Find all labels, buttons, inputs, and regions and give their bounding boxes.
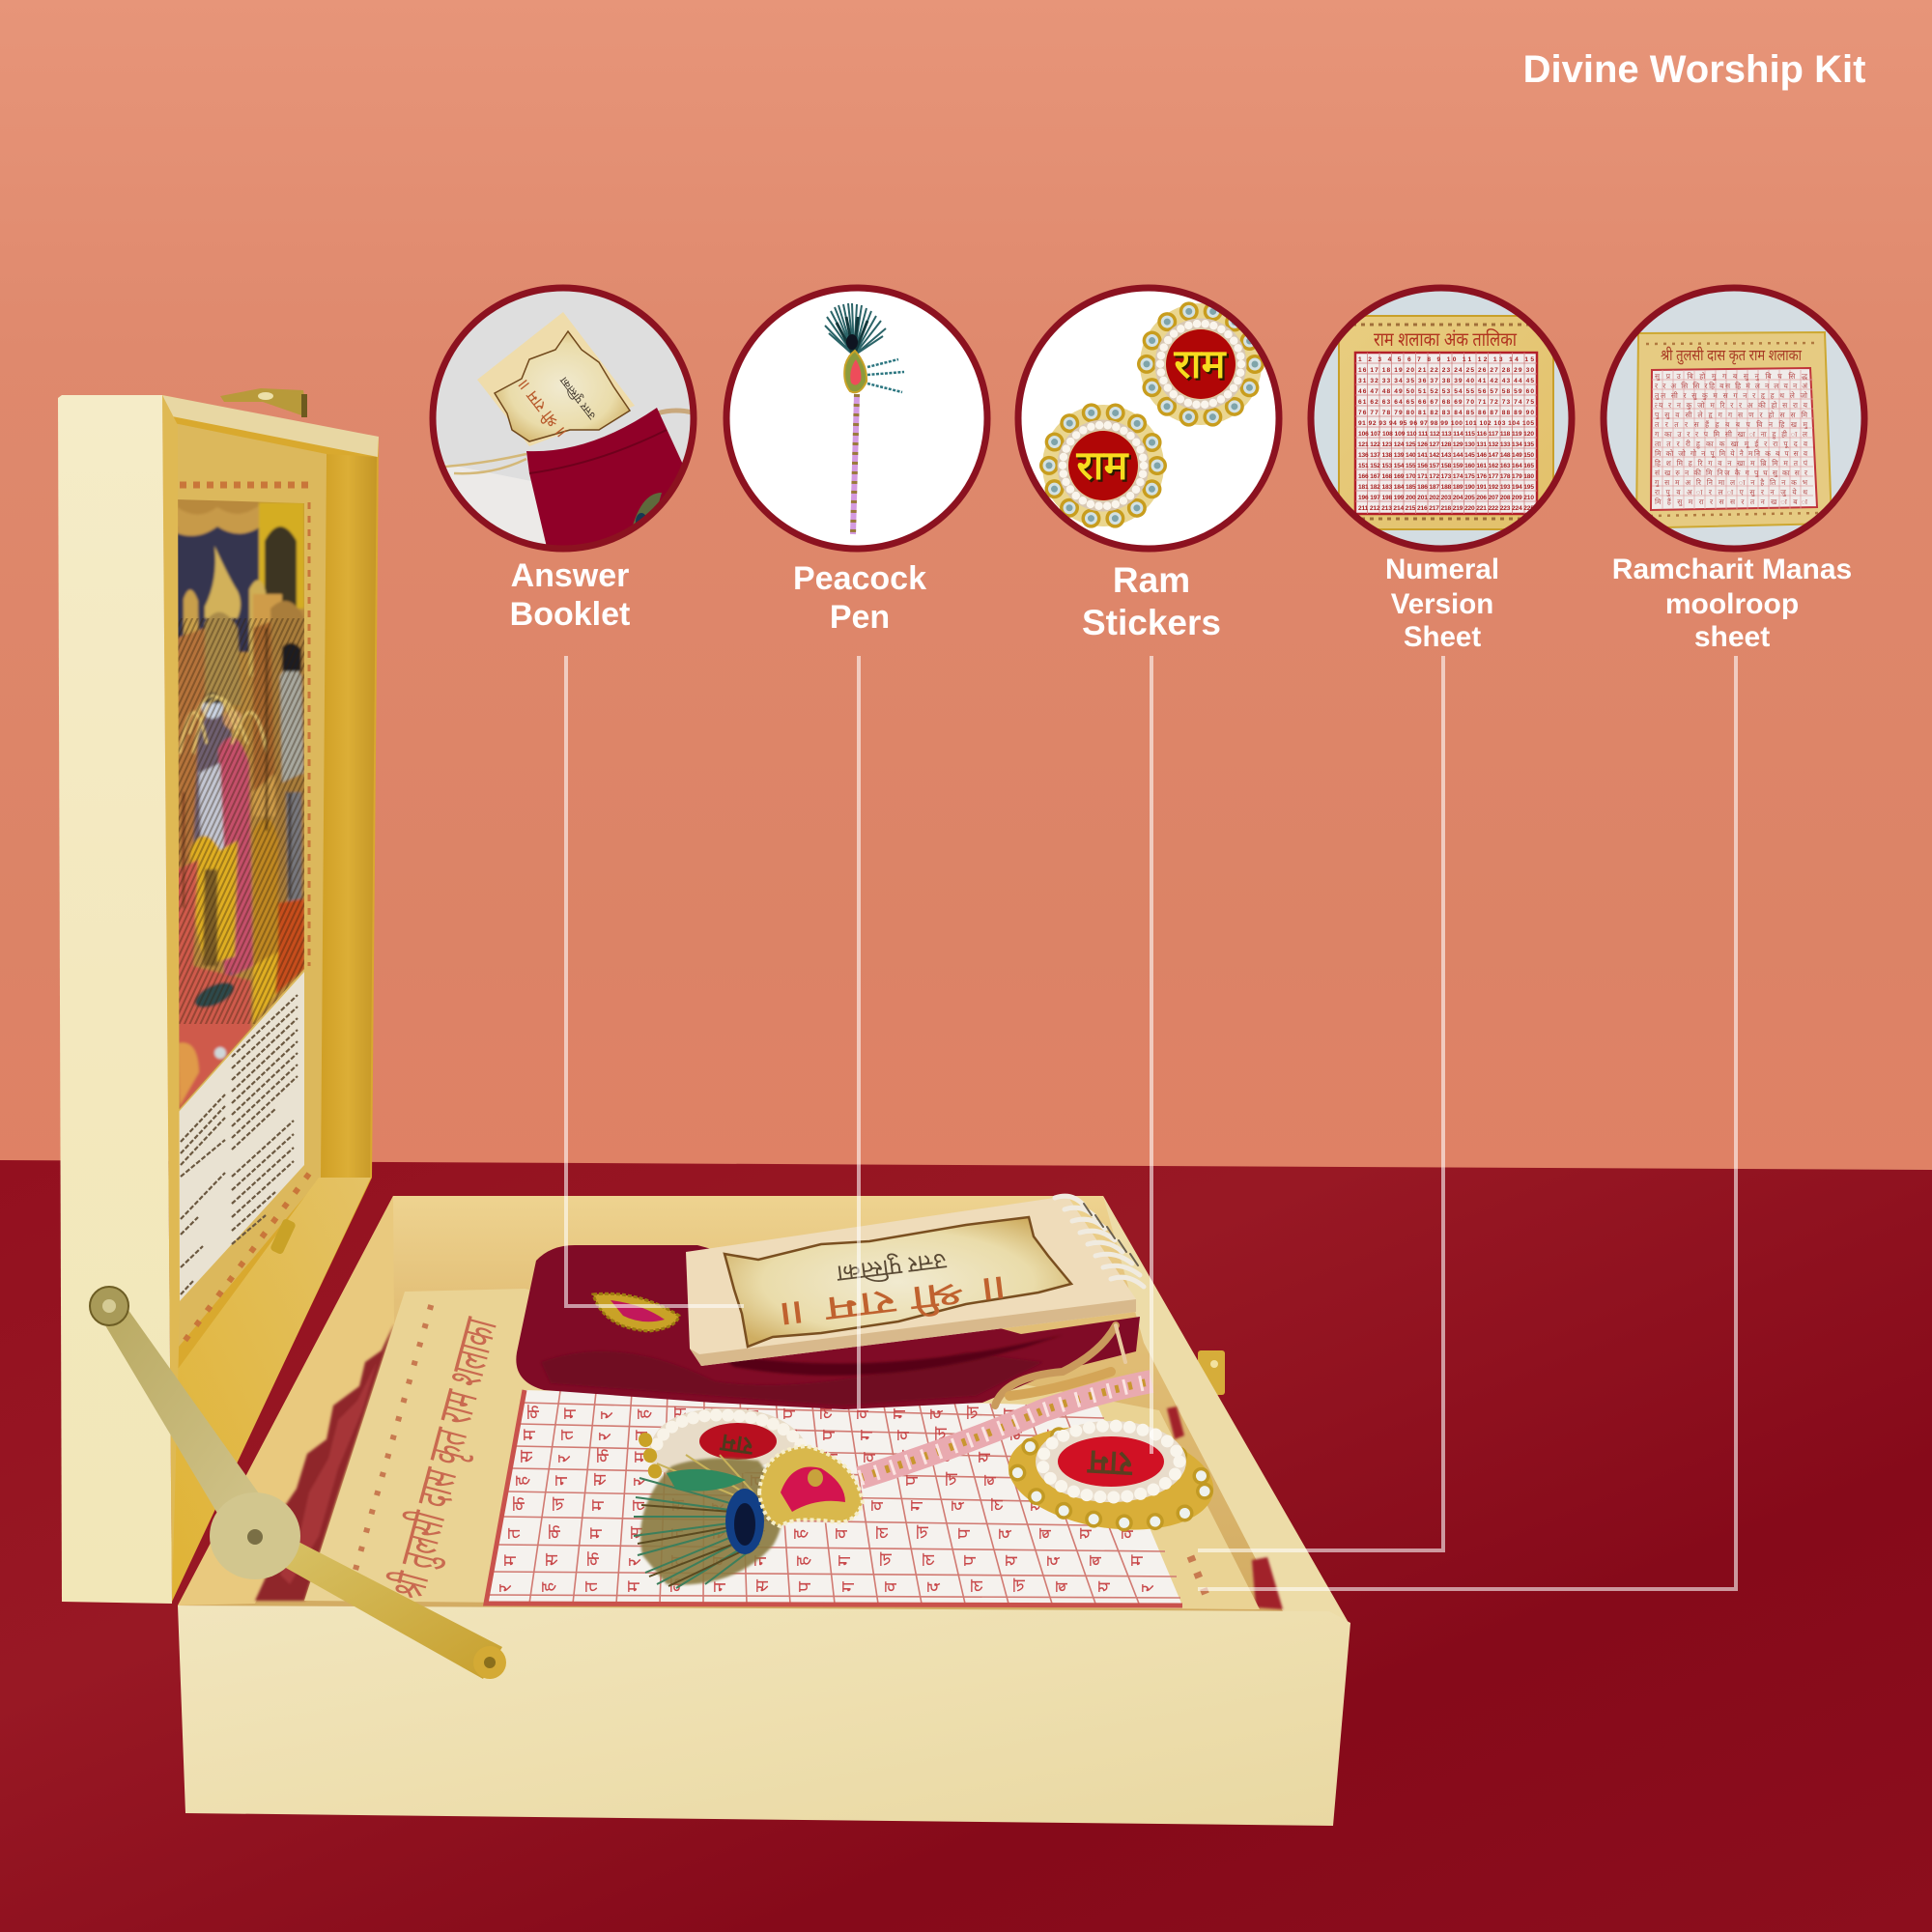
sheet left dots [355, 1299, 433, 1570]
icon ring [726, 288, 987, 549]
label: Ram [1113, 560, 1190, 600]
panel: numeral sheet callout [1304, 280, 1584, 653]
icon: peacock pen [730, 292, 983, 545]
lower brass arm [246, 1526, 502, 1679]
icon: letter sheet: ता त र री हु का क खा मू ई र रा पू द व [1655, 440, 1808, 449]
sticker lower: राम [1078, 444, 1130, 490]
back sticker: राम [719, 1429, 754, 1462]
icon: letter sheet: रा पु व अ ा र ल ा ए सु र न जु ये थ [1655, 488, 1807, 497]
letter grid: मसकरतवनहगजलपयदबम [500, 1551, 1148, 1566]
icon ring [433, 288, 694, 549]
peacock feather [634, 1455, 782, 1588]
icon: numeral sheet: 31 32 33 34 35 36 37 38 39 40 41 42 43 44 45 [1358, 378, 1534, 384]
label: Numeral [1385, 554, 1499, 585]
lid hinge [270, 1218, 297, 1255]
red crinkled tissue [255, 1323, 1283, 1609]
lid decorative dots [180, 485, 309, 1348]
information text panel [179, 972, 304, 1302]
icon ring [1311, 288, 1572, 549]
icon: stickers [1022, 292, 1275, 545]
letter grid: सरकमतहनगपवलदयजब [517, 1448, 1071, 1463]
large sheet in box [304, 1289, 1260, 1609]
icon ring [1604, 288, 1864, 549]
background wall [0, 0, 1932, 1169]
panel: answer booklet callout [425, 280, 705, 633]
icon: letter sheet: मि हैं सु म रा र स स र त न ख ा ब ा [1655, 497, 1808, 507]
lid top rim [162, 395, 379, 457]
icon: letter sheet: श्री तुलसी दास कृत राम शलाका [1661, 346, 1803, 365]
icon: numeral sheet: 181 182 183 184 185 186 187 188 189 190 191 192 193 194 195 [1358, 484, 1534, 491]
box right wall [1103, 1196, 1349, 1623]
brass stay arm [90, 1287, 506, 1679]
sticker lower: राम [1076, 442, 1128, 488]
icon: booklet and pouch photo [437, 292, 690, 545]
icon: numeral sheet: 46 47 48 49 50 51 52 53 54 55 56 57 58 59 60 [1358, 388, 1534, 395]
panel: box [178, 1196, 1350, 1826]
ribbon loop [995, 1325, 1125, 1406]
box inner back wall [178, 1196, 1349, 1623]
letter grid: कजमतसरनहपवगदलयबज [509, 1496, 1127, 1511]
connector lines [566, 656, 1736, 1589]
label: Ramcharit Manas [1612, 554, 1852, 585]
icon: numeral sheet: 121 122 123 124 125 126 127 128 129 130 131 132 133 134 135 [1358, 441, 1534, 448]
lid interior base [162, 395, 379, 1599]
painting of Ram Darbar [174, 497, 309, 1116]
icon: numeral sheet: 61 62 63 64 65 66 67 68 69 70 71 72 73 74 75 [1358, 399, 1534, 406]
label: Sheet [1404, 621, 1481, 653]
icon: letter sheet: तुल सी र सु कु म स ग न र हृ ह थ ले जो [1655, 391, 1808, 401]
answer booklet: उत्तर पुस्तिका [835, 1246, 948, 1288]
large paisley [759, 1446, 863, 1526]
lid gold spine strip [162, 395, 180, 1604]
box left wall [178, 1196, 394, 1605]
booklet spiral rings [1055, 1196, 1144, 1287]
icon: numeral sheet: 166 167 168 169 170 171 172 173 174 175 176 177 178 179 180 [1358, 473, 1534, 480]
icon: letter sheet: मि को जो गो न पू मि ये नै मनि क ब प स व [1655, 449, 1808, 459]
lid page paper [174, 423, 327, 1352]
panel: ramcharit manas sheet callout [1594, 280, 1874, 653]
back sticker [645, 1408, 811, 1478]
panel: peacock pen callout [720, 280, 1000, 636]
front sticker [1002, 1414, 1220, 1542]
letter grid: हनसरमकतवगलपजबदय [512, 1471, 1079, 1486]
sticker upper: राम [1176, 343, 1228, 388]
icon: numeral sheet [1304, 280, 1584, 560]
icon: numeral sheet: 196 197 198 199 200 201 202 203 204 205 206 207 208 209 210 [1358, 495, 1534, 501]
lid right gold wall [319, 454, 377, 1178]
icon: numeral sheet: 106 107 108 109 110 111 112 113 114 115 116 117 118 119 120 [1358, 431, 1534, 438]
icon: numeral sheet: 76 77 78 79 80 81 82 83 84 85 86 87 88 89 90 [1358, 410, 1534, 416]
label: moolroop [1665, 588, 1799, 620]
front sticker: राम [1086, 1443, 1133, 1485]
information text lines [181, 995, 298, 1294]
label: Booklet [510, 596, 630, 633]
letter grid: मतरनसकहलपगवजदबय [520, 1426, 1064, 1440]
pink braided tassel [860, 1381, 1151, 1478]
label: Peacock [793, 560, 926, 597]
lid lower gold wall [172, 1178, 371, 1602]
icon: letter sheet: त र त र स हैं ह ब ब प वि न हि ख मु [1655, 420, 1808, 430]
small paisley on pouch [593, 1293, 679, 1331]
icon: letter sheet: पु सु व सी ले हृ ग ग स ण र हो स स मि [1655, 411, 1808, 420]
icon: booklet and pouch photo: ॥ श्री राम ॥ [513, 376, 571, 442]
sheet title: श्री तुलसी दास कृत राम शलाका [381, 1312, 509, 1605]
upper brass arm [94, 1293, 275, 1546]
icon: numeral sheet: 91 92 93 94 95 96 97 98 99 100 101 102 103 104 105 [1358, 420, 1534, 427]
icon: numeral sheet: 151 152 153 154 155 156 157 158 159 160 161 162 163 164 165 [1358, 463, 1534, 469]
label: Answer [511, 557, 629, 594]
letter grid [486, 1390, 1182, 1605]
icon: letter sheet: हि श मि ह रि ग व न खा म ब्रि मि म त पं [1655, 459, 1808, 468]
letter grid: तकमसनरगहवलजपदबयक [504, 1524, 1138, 1539]
sticker upper: राम [1174, 341, 1226, 386]
panel: ram stickers callout [1014, 280, 1294, 642]
brass pivot [210, 1492, 300, 1579]
panel: open lid [58, 388, 379, 1604]
icon ring [1018, 288, 1279, 549]
sheet right dots [1186, 1546, 1206, 1594]
box outer clasp [1198, 1350, 1225, 1395]
icon: numeral sheet: 136 137 138 139 140 141 142 143 144 145 146 147 148 149 150 [1358, 452, 1534, 459]
icon: letter sheet: त्य र न कु जो म रि र र अ की हो स रा य [1655, 401, 1808, 411]
letter grid: रहतमकनसपगवदलजबयर [496, 1577, 1158, 1592]
lid front cream face [58, 395, 172, 1604]
label: Version [1391, 588, 1493, 620]
icon: numeral sheet: 1 2 3 4 5 6 7 8 9 10 11 12 13 14 15 [1358, 356, 1534, 363]
label: Pen [830, 599, 890, 636]
icon: letter sheet: सं ख रु न की मि निज कै ग पु घ सु का स र [1655, 469, 1808, 478]
icon: letter sheet [1594, 280, 1874, 560]
icon: numeral sheet: राम शलाका अंक तालिका [1374, 328, 1518, 351]
sticker upper [1140, 303, 1262, 425]
icon: letter sheet: ग का उ र र प मि सी खा ा ना हु ही ा ल [1655, 430, 1808, 440]
icon: numeral sheet: 211 212 213 214 215 216 217 218 219 220 221 222 223 224 225 [1358, 505, 1534, 512]
icon: booklet and pouch photo: उत्तर पुस्तिका [557, 375, 598, 422]
title: Divine Worship Kit [1523, 48, 1865, 91]
label: sheet [1694, 621, 1770, 653]
icon: letter sheet: गु स म अ रि नि मा ल ा न है ति न क भ [1655, 478, 1808, 488]
sticker lower [1042, 405, 1164, 526]
letter grid: कमरहसतनपलवगदजयब [524, 1405, 1057, 1419]
lid clasp [220, 388, 307, 417]
answer booklet: ॥ श्री राम ॥ [775, 1267, 1015, 1336]
background red cloth [0, 1160, 1932, 1932]
answer booklet [686, 1196, 1136, 1366]
icon: letter sheet: सु प्र उ बि हो मु ग ब सु नु बि घ सि द्ध [1655, 372, 1808, 382]
box front face [178, 1605, 1350, 1826]
icon: letter sheet: र र अ सि सि रहि बस हि मं ल न ल य न अं [1655, 382, 1807, 390]
label: Stickers [1082, 603, 1221, 642]
velvet pouch [516, 1245, 1140, 1409]
icon: numeral sheet: 16 17 18 19 20 21 22 23 24 25 26 27 28 29 30 [1358, 367, 1534, 374]
